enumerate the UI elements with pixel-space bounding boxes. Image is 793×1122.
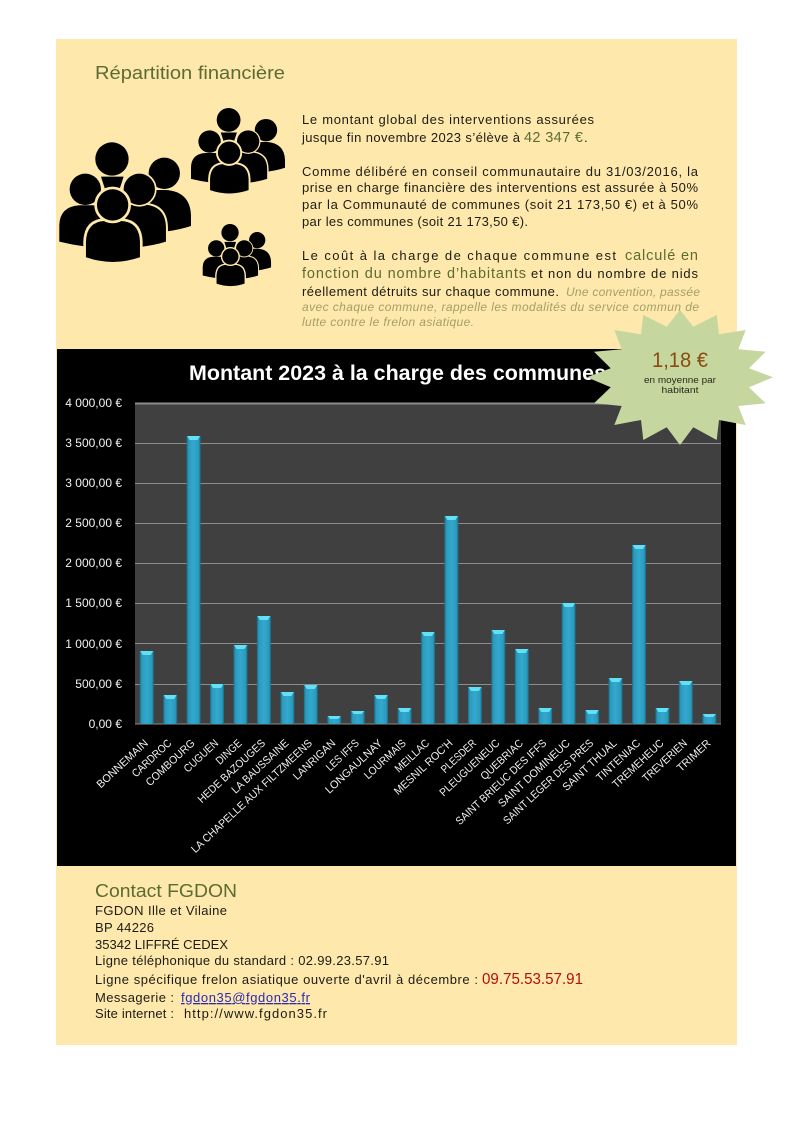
panel: cream background — [56, 39, 737, 1045]
icon: large group of people — [59, 142, 191, 262]
y axis labels: 0,00 € — [89, 717, 122, 731]
icon: medium group of people — [191, 108, 285, 193]
x axis labels: communes: LES IFFS — [324, 737, 362, 774]
x axis labels: communes: MEILLAC — [393, 737, 432, 775]
x axis labels: communes: PLESDER — [439, 737, 479, 776]
paragraph: cost per commune: réellement détruits sur chaque commune. — [302, 284, 559, 299]
email link: fgdon35@fgdon35.fr — [181, 990, 311, 1005]
paragraph: cost per commune: lutte contre le frelon asiatique. — [302, 315, 474, 329]
callout: average per inhabitant star: en moyenne par — [644, 375, 716, 386]
paragraph: cost per commune: Une convention, passée — [566, 285, 700, 299]
x axis labels: communes: DINGE — [214, 737, 245, 767]
text block: intervention amounts — [301, 112, 700, 329]
paragraph: global amount: Le montant global des interventions assurées — [302, 112, 594, 127]
contact block: http://www.fgdon35.fr — [184, 1006, 328, 1021]
x axis labels: communes: CUGUEN — [182, 737, 221, 775]
y axis labels — [65, 396, 122, 731]
paragraph: global amount: . — [584, 130, 588, 145]
x axis labels: communes: SAINT THUAL — [561, 737, 620, 794]
x axis labels: communes: LANRIGAN — [291, 737, 338, 783]
paragraph: funding split — [302, 164, 699, 229]
bar chart: amount per commune — [57, 349, 736, 866]
paragraph: funding split: prise en charge financière des interventions est assurée à 50% — [302, 180, 698, 195]
y axis labels: 1 500,00 € — [65, 596, 122, 610]
x axis labels: communes: CARDROC — [130, 737, 174, 780]
paragraph: cost per commune: Le coût à la charge de chaque commune est — [302, 248, 616, 263]
x axis labels: communes: TINTENIAC — [594, 737, 643, 784]
paragraph: global amount: 42 347 € — [524, 130, 583, 146]
x axis labels: communes: BONNEMAIN — [95, 737, 151, 791]
x axis labels: communes: SAINT DOMINEUC — [496, 737, 573, 810]
contact block: Ligne téléphonique du standard : 02.99.23.57.91 — [95, 953, 389, 968]
x axis labels: communes: LA BAUSSAINE — [230, 737, 291, 796]
y axis labels: 2 500,00 € — [65, 516, 122, 530]
hotline number: 09.75.53.57.91 — [482, 971, 583, 988]
contact block — [95, 880, 583, 1021]
x axis labels: communes: LA CHAPELLE AUX FILTZMEENS — [189, 737, 315, 856]
icon: small group of people — [203, 224, 271, 286]
y axis labels: 2 000,00 € — [65, 556, 122, 570]
x axis labels: communes: PLEUGUENEUC — [437, 737, 502, 799]
callout: average per inhabitant star — [587, 310, 773, 445]
contact block: BP 44226 — [95, 920, 154, 935]
x axis labels: communes — [95, 737, 713, 856]
callout: average per inhabitant star: 1,18 € — [652, 349, 708, 372]
contact block: 35342 LIFFRÉ CEDEX — [95, 937, 228, 952]
paragraph: cost per commune: fonction du nombre d’habitants — [302, 266, 526, 282]
contact block: FGDON Ille et Vilaine — [95, 903, 227, 918]
heading: Contact FGDON: Contact FGDON — [95, 880, 237, 901]
y axis labels: 1 000,00 € — [65, 637, 122, 651]
contact block: Site internet : — [95, 1006, 174, 1021]
paragraph: cost per commune: et non du nombre de nids — [531, 266, 698, 281]
paragraph: funding split: par la Communauté de communes (soit 21 173,50 €) et à 50% — [302, 197, 698, 212]
x axis labels: communes: QUEBRIAC — [479, 737, 526, 783]
heading: Répartition financière: Répartition financière — [95, 62, 285, 83]
contact block: Messagerie : — [95, 990, 174, 1005]
y axis labels: 4 000,00 € — [65, 396, 122, 410]
x axis labels: communes: TREMEHEUC — [610, 737, 666, 791]
paragraph: cost per commune — [302, 248, 700, 329]
x axis labels: communes: TREVERIEN — [640, 737, 690, 785]
x axis labels: communes: COMBOURG — [144, 737, 198, 789]
bars — [140, 436, 716, 724]
paragraph: global amount — [301, 112, 594, 146]
x axis labels: communes: HEDE BAZOUGES — [196, 737, 268, 806]
paragraph: cost per commune: calculé en — [625, 248, 698, 264]
paragraph: funding split: Comme délibéré en conseil communautaire du 31/03/2016, la — [302, 164, 699, 179]
y axis labels: 500,00 € — [75, 677, 122, 691]
paragraph: global amount: jusque fin novembre 2023 s’élève à — [301, 130, 521, 145]
y axis labels: 3 000,00 € — [65, 476, 122, 490]
x axis labels: communes: SAINT LEGER DES PRES — [501, 737, 596, 827]
contact block: Ligne spécifique frelon asiatique ouverte d'avril à décembre : — [95, 972, 478, 987]
callout: average per inhabitant star: habitant — [662, 385, 699, 396]
plot area — [135, 403, 721, 724]
x axis labels: communes: LONGAULNAY — [323, 737, 386, 796]
x axis labels: communes: LOURMAIS — [362, 737, 409, 782]
x axis labels: communes: SAINT BRIEUC DES IFFS — [454, 737, 549, 828]
chart title: Montant 2023 à la charge des communes — [189, 361, 606, 385]
y axis labels: 3 500,00 € — [65, 436, 122, 450]
paragraph: funding split: par les communes (soit 21 173,50 €). — [302, 214, 528, 229]
x axis labels: communes: MESNIL ROC'H — [392, 737, 455, 798]
x axis labels: communes: TRIMER — [675, 737, 713, 774]
paragraph: cost per commune: avec chaque commune, rappelle les modalités du service commun de — [302, 300, 699, 314]
